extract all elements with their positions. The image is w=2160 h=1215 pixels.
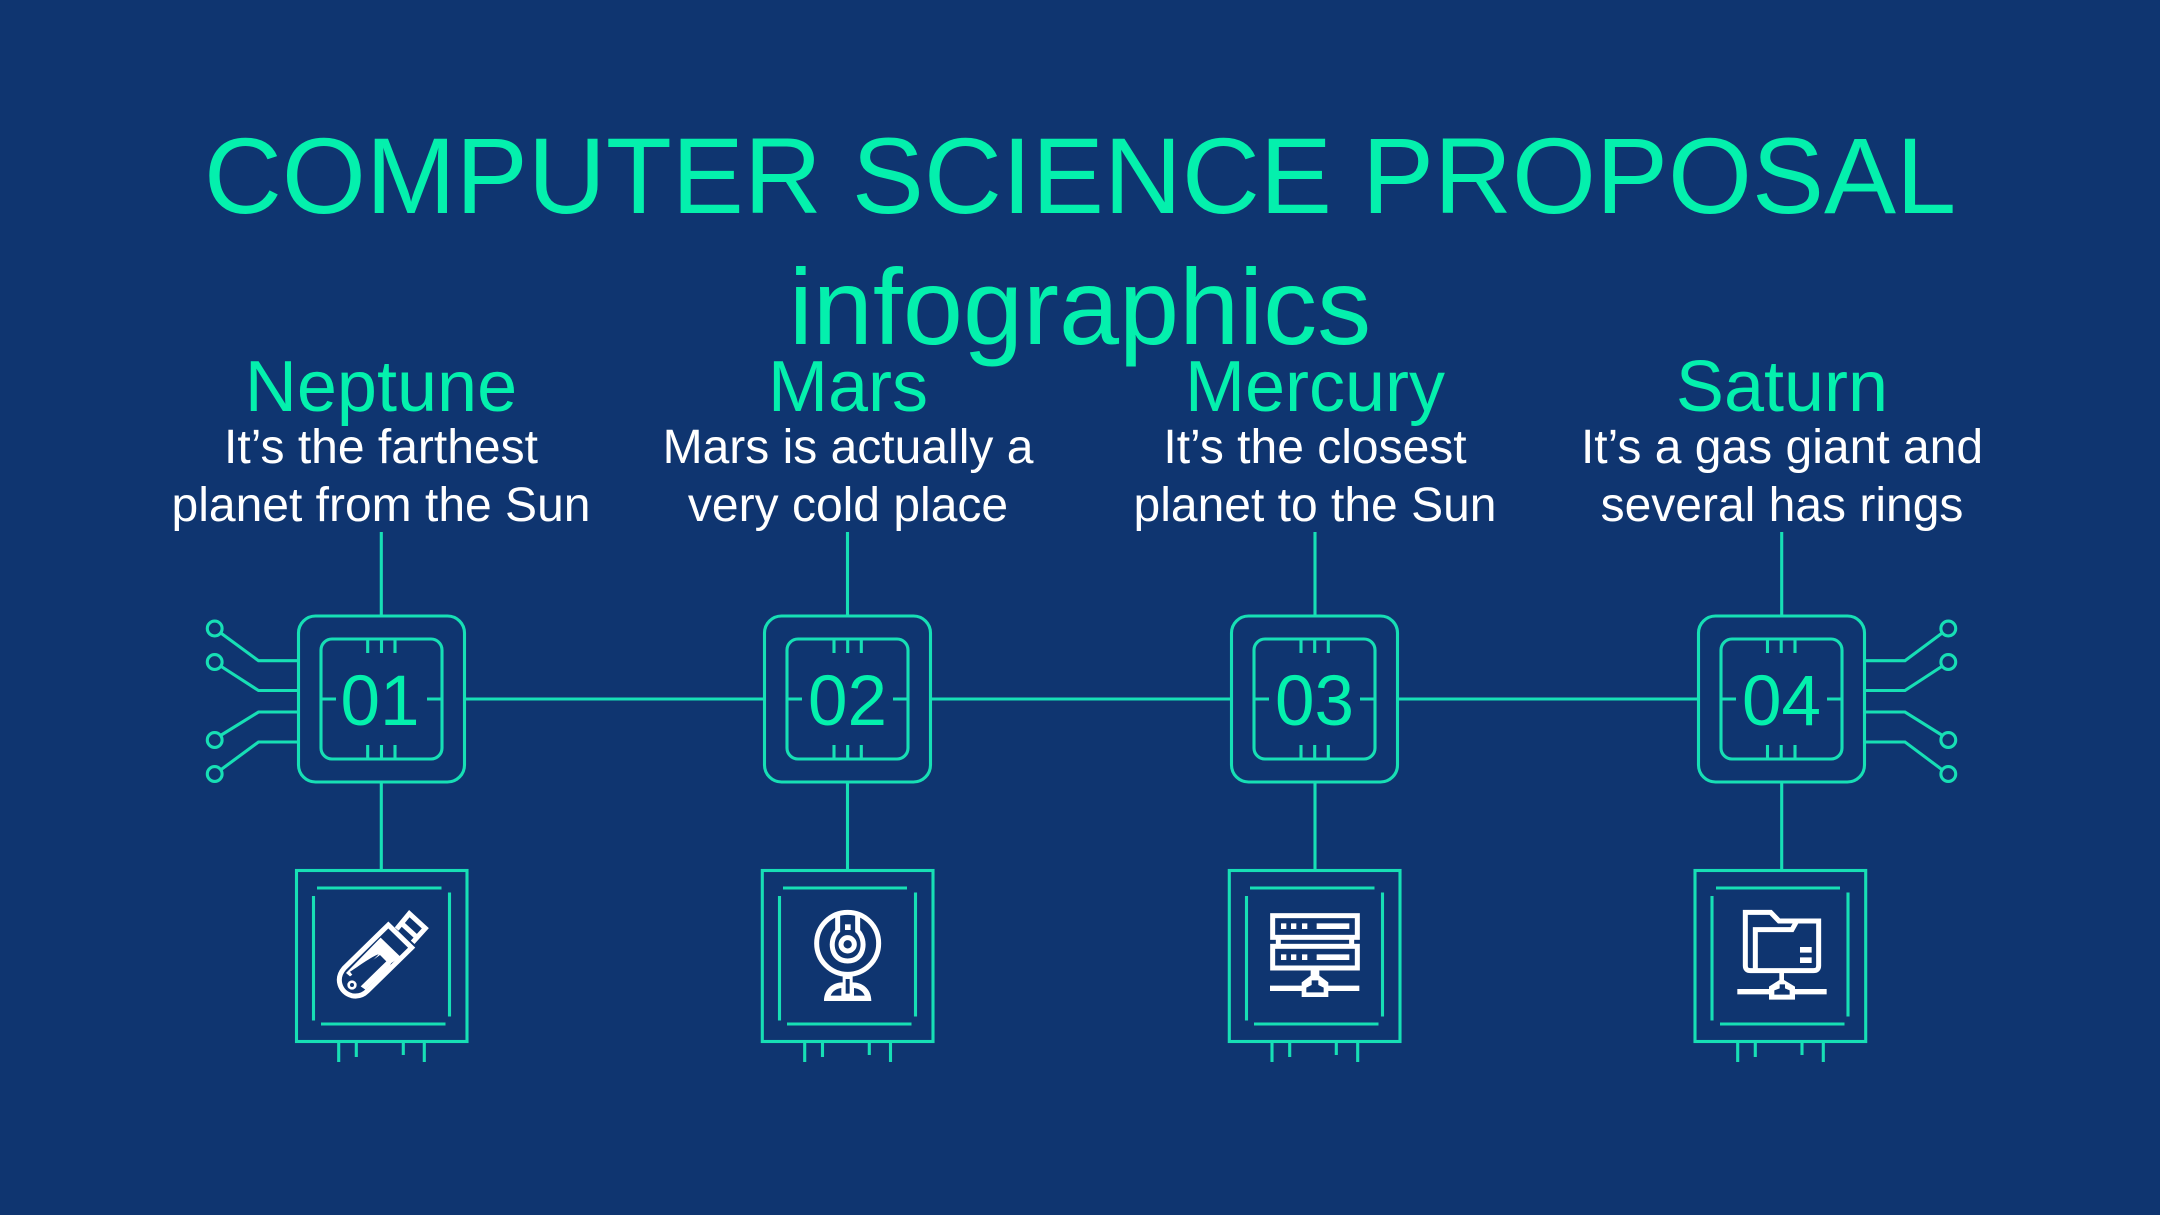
icon frame 2	[762, 870, 933, 1062]
heading: Mars: Mars	[768, 347, 928, 427]
icon frame 3	[1229, 870, 1400, 1062]
chip 02	[764, 532, 930, 870]
description: Mercury: planet to the Sun	[1134, 479, 1496, 532]
column 2: Mars	[663, 347, 1034, 1062]
title: infographics	[789, 246, 1371, 367]
heading: Mercury: Mercury	[1185, 347, 1445, 427]
description: Mars: Mars is actually a	[663, 421, 1034, 474]
heading: Saturn: Saturn	[1676, 347, 1888, 427]
connector line between chips	[465, 697, 1698, 701]
description: Saturn: several has rings	[1601, 479, 1963, 532]
icon: network folder	[1737, 912, 1827, 1000]
number 01: 01	[341, 662, 419, 741]
number 03: 03	[1275, 662, 1354, 741]
description: Saturn: It’s a gas giant and	[1581, 421, 1983, 474]
column 3: Mercury	[1134, 347, 1496, 1062]
description: Mars: very cold place	[688, 479, 1008, 532]
column 1: Neptune	[172, 347, 590, 1062]
chip 03	[1232, 532, 1398, 870]
title: COMPUTER SCIENCE PROPOSAL	[204, 115, 1956, 236]
icon: usb stick	[339, 914, 425, 996]
number 02: 02	[808, 662, 887, 741]
description: Neptune: planet from the Sun	[172, 479, 590, 532]
circuit leads right	[1865, 621, 1956, 781]
heading: Neptune: Neptune	[245, 347, 517, 427]
column 4: Saturn	[1581, 347, 1983, 1062]
icon frame 1	[296, 870, 467, 1062]
number 04: 04	[1742, 662, 1821, 741]
circuit leads left	[207, 621, 298, 781]
icon: server network	[1270, 916, 1359, 997]
description: Neptune: It’s the farthest	[224, 421, 538, 474]
icon frame 4	[1695, 870, 1866, 1062]
description: Mercury: It’s the closest	[1163, 421, 1467, 474]
icon: webcam	[817, 912, 879, 1001]
chip 01	[207, 532, 465, 870]
chip 04	[1698, 532, 1956, 870]
